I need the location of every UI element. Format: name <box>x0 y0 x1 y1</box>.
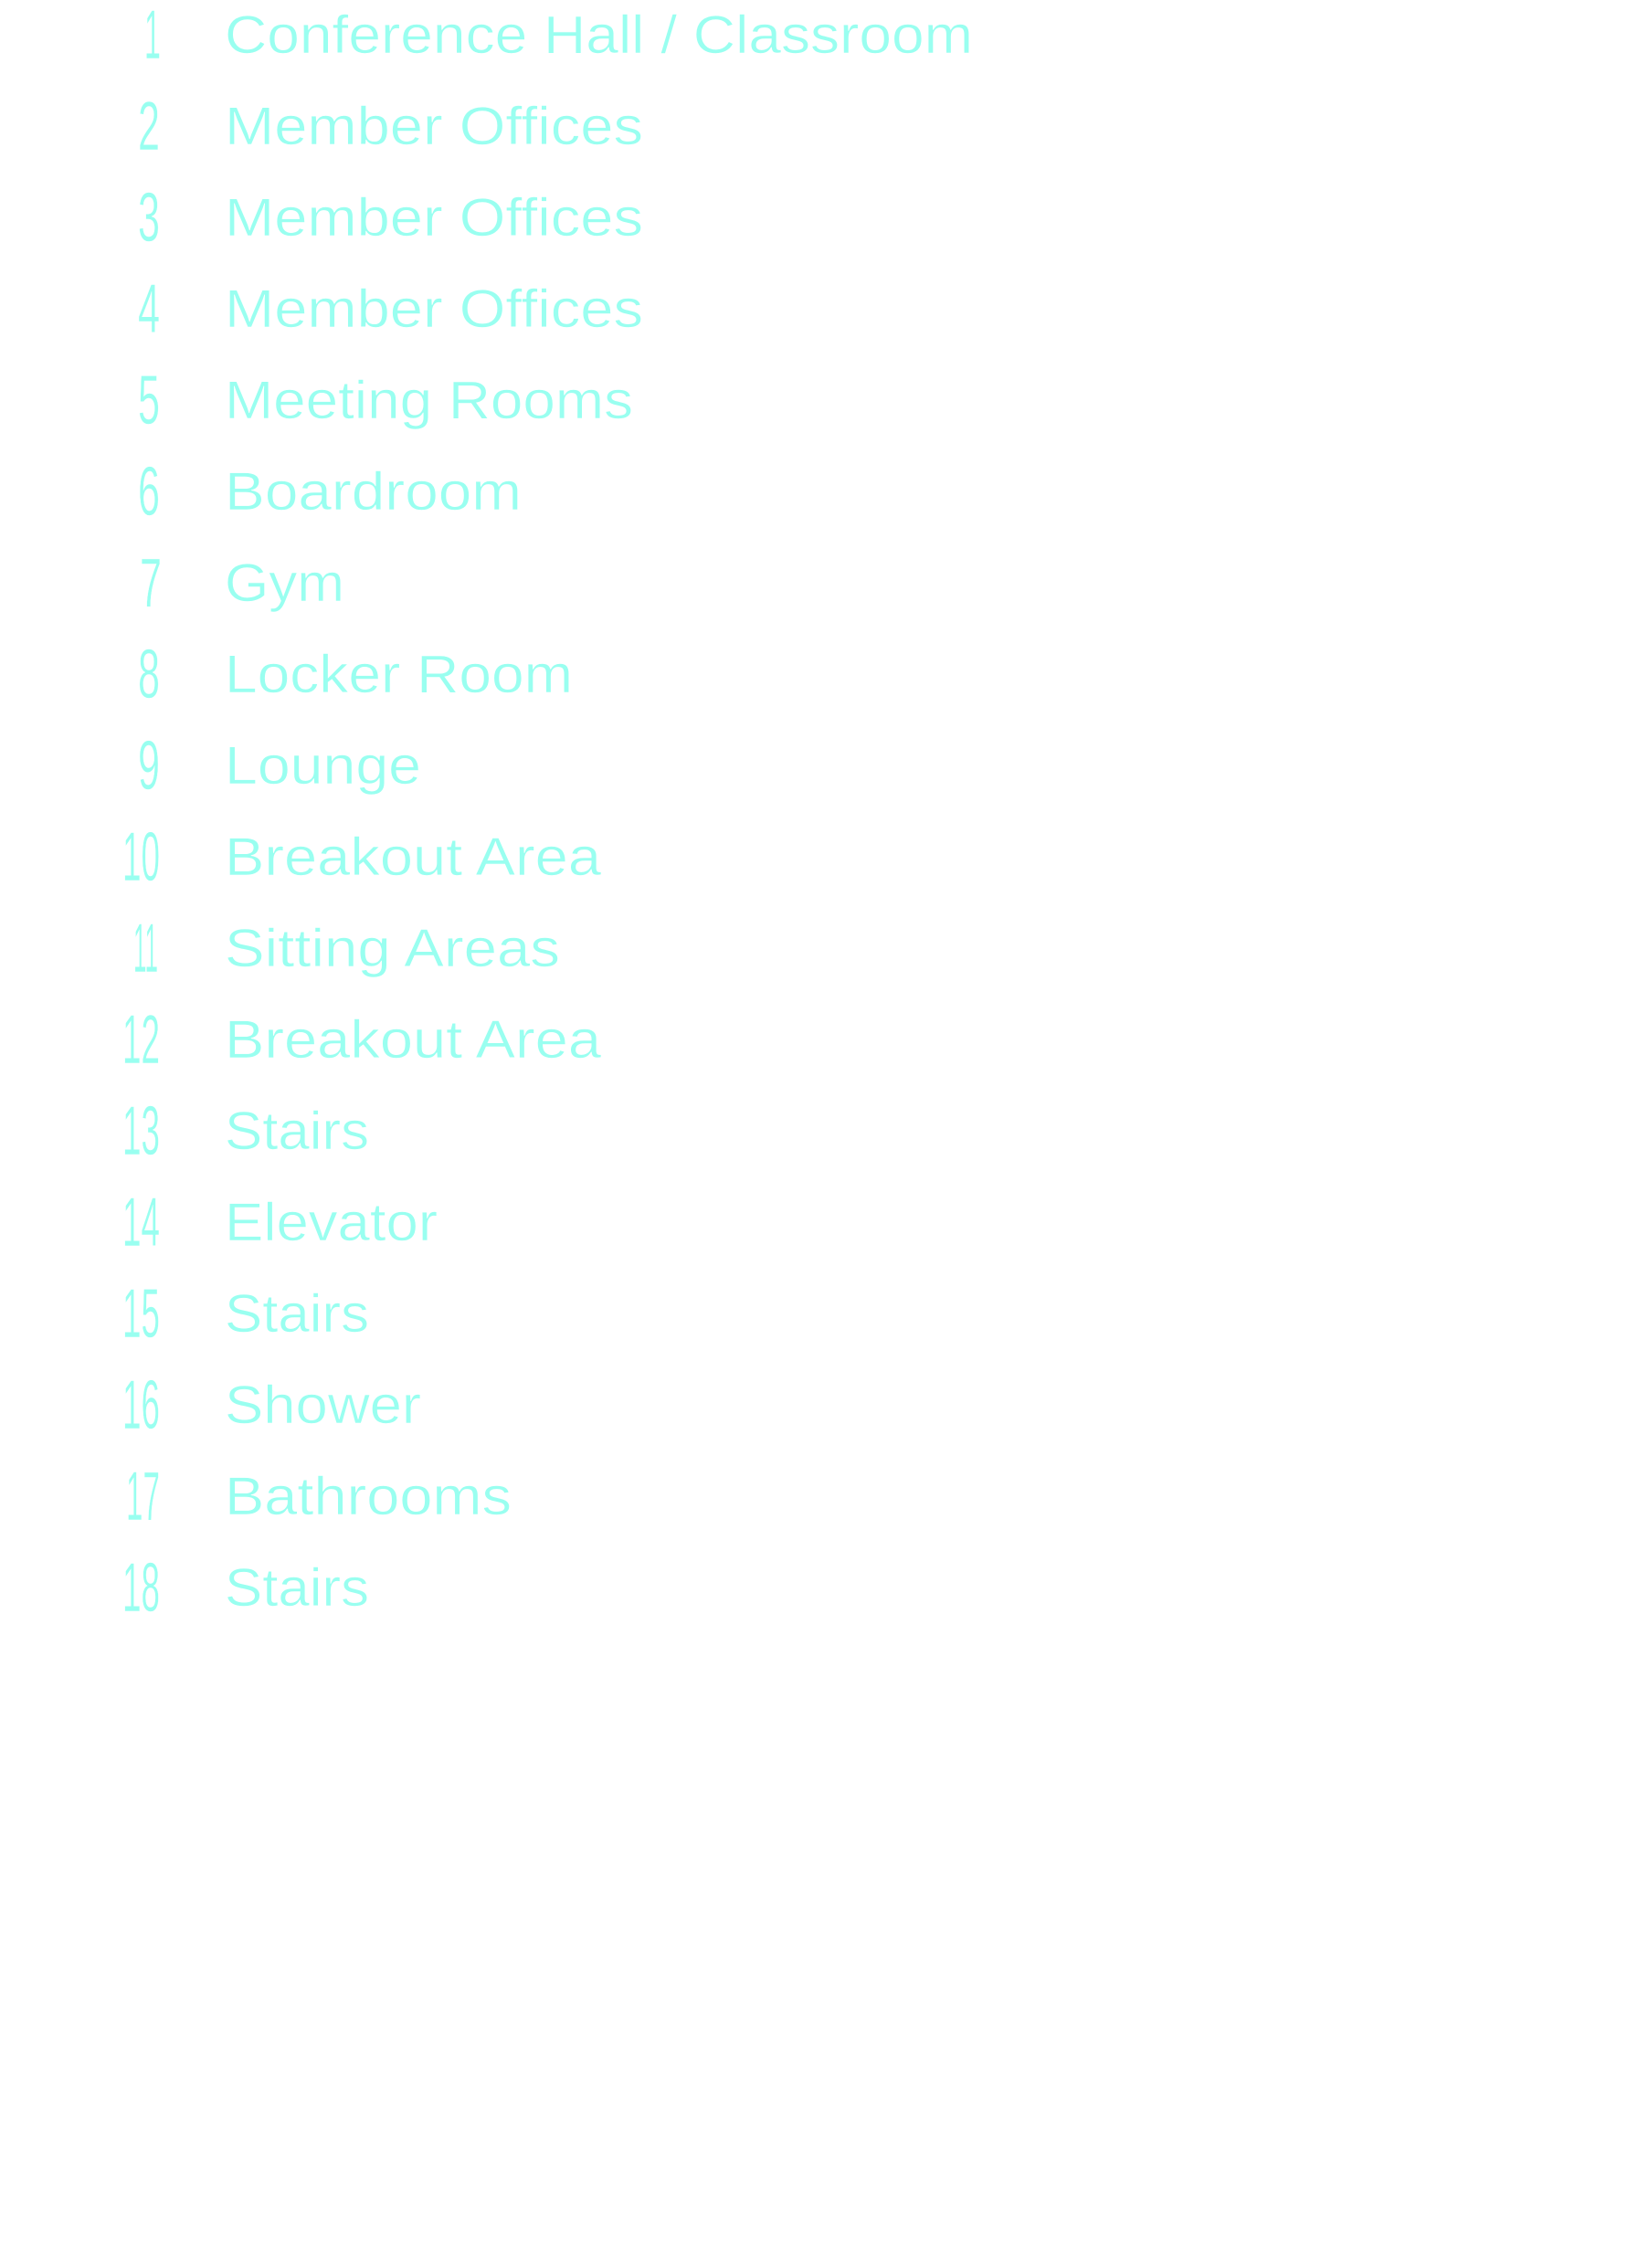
row 9: Lounge: Lounge <box>225 736 421 796</box>
row 4: Member Offices <box>138 270 643 348</box>
row 12: Breakout Area: 12 <box>122 1001 160 1079</box>
row 3: Member Offices: Member Offices <box>225 188 643 248</box>
row 5: Meeting Rooms: 5 <box>138 362 160 439</box>
row 13: Stairs <box>122 1092 369 1170</box>
row 3: Member Offices: 3 <box>138 179 160 257</box>
row 13: Stairs: 13 <box>122 1092 160 1170</box>
row 11: Sitting Areas <box>133 910 560 987</box>
row 7: Gym: 7 <box>140 544 162 622</box>
row 15: Stairs: 15 <box>122 1275 160 1353</box>
row 8: Locker Room <box>138 636 573 713</box>
row 4: Member Offices: 4 <box>138 270 160 348</box>
row 2: Member Offices: Member Offices <box>225 97 643 156</box>
row 14: Elevator: 14 <box>122 1184 160 1261</box>
row 14: Elevator: Elevator <box>225 1193 438 1252</box>
row 18: Stairs: 18 <box>122 1549 160 1627</box>
row 17: Bathrooms: 17 <box>126 1458 160 1535</box>
row 7: Gym <box>140 544 344 622</box>
row 8: Locker Room: 8 <box>138 636 160 713</box>
row 3: Member Offices <box>138 179 643 257</box>
row 11: Sitting Areas: Sitting Areas <box>225 919 560 978</box>
row 6: Boardroom: Boardroom <box>225 462 522 522</box>
row 2: Member Offices <box>138 88 643 165</box>
row 5: Meeting Rooms <box>138 362 633 439</box>
row 10: Breakout Area <box>122 818 602 896</box>
row 17: Bathrooms: Bathrooms <box>225 1467 512 1526</box>
row 7: Gym: Gym <box>225 554 344 613</box>
row 10: Breakout Area: Breakout Area <box>225 828 602 887</box>
row 10: Breakout Area: 10 <box>122 818 160 896</box>
row 12: Breakout Area: Breakout Area <box>225 1010 602 1070</box>
row 9: Lounge: 9 <box>138 727 160 805</box>
row 16: Shower: Shower <box>225 1376 421 1435</box>
row 18: Stairs: Stairs <box>225 1558 369 1618</box>
row 15: Stairs <box>122 1275 369 1353</box>
row 6: Boardroom <box>138 453 522 531</box>
row 4: Member Offices: Member Offices <box>225 280 643 339</box>
row 16: Shower <box>122 1366 421 1444</box>
row 17: Bathrooms <box>126 1458 512 1535</box>
row 13: Stairs: Stairs <box>225 1102 369 1161</box>
row 8: Locker Room: Locker Room <box>225 645 573 704</box>
row 6: Boardroom: 6 <box>138 453 160 531</box>
row 2: Member Offices: 2 <box>138 88 160 165</box>
row 14: Elevator <box>122 1184 438 1261</box>
row 15: Stairs: Stairs <box>225 1284 369 1344</box>
row 1: Conference Hall / Classroom <box>144 0 973 74</box>
row 1: Conference Hall / Classroom: Conference Hall / Classroom <box>225 5 973 65</box>
row 11: Sitting Areas: 11 <box>133 910 158 987</box>
row 12: Breakout Area <box>122 1001 602 1079</box>
row 16: Shower: 16 <box>122 1366 160 1444</box>
row 18: Stairs <box>122 1549 369 1627</box>
row 9: Lounge <box>138 727 421 805</box>
row 5: Meeting Rooms: Meeting Rooms <box>225 371 633 430</box>
